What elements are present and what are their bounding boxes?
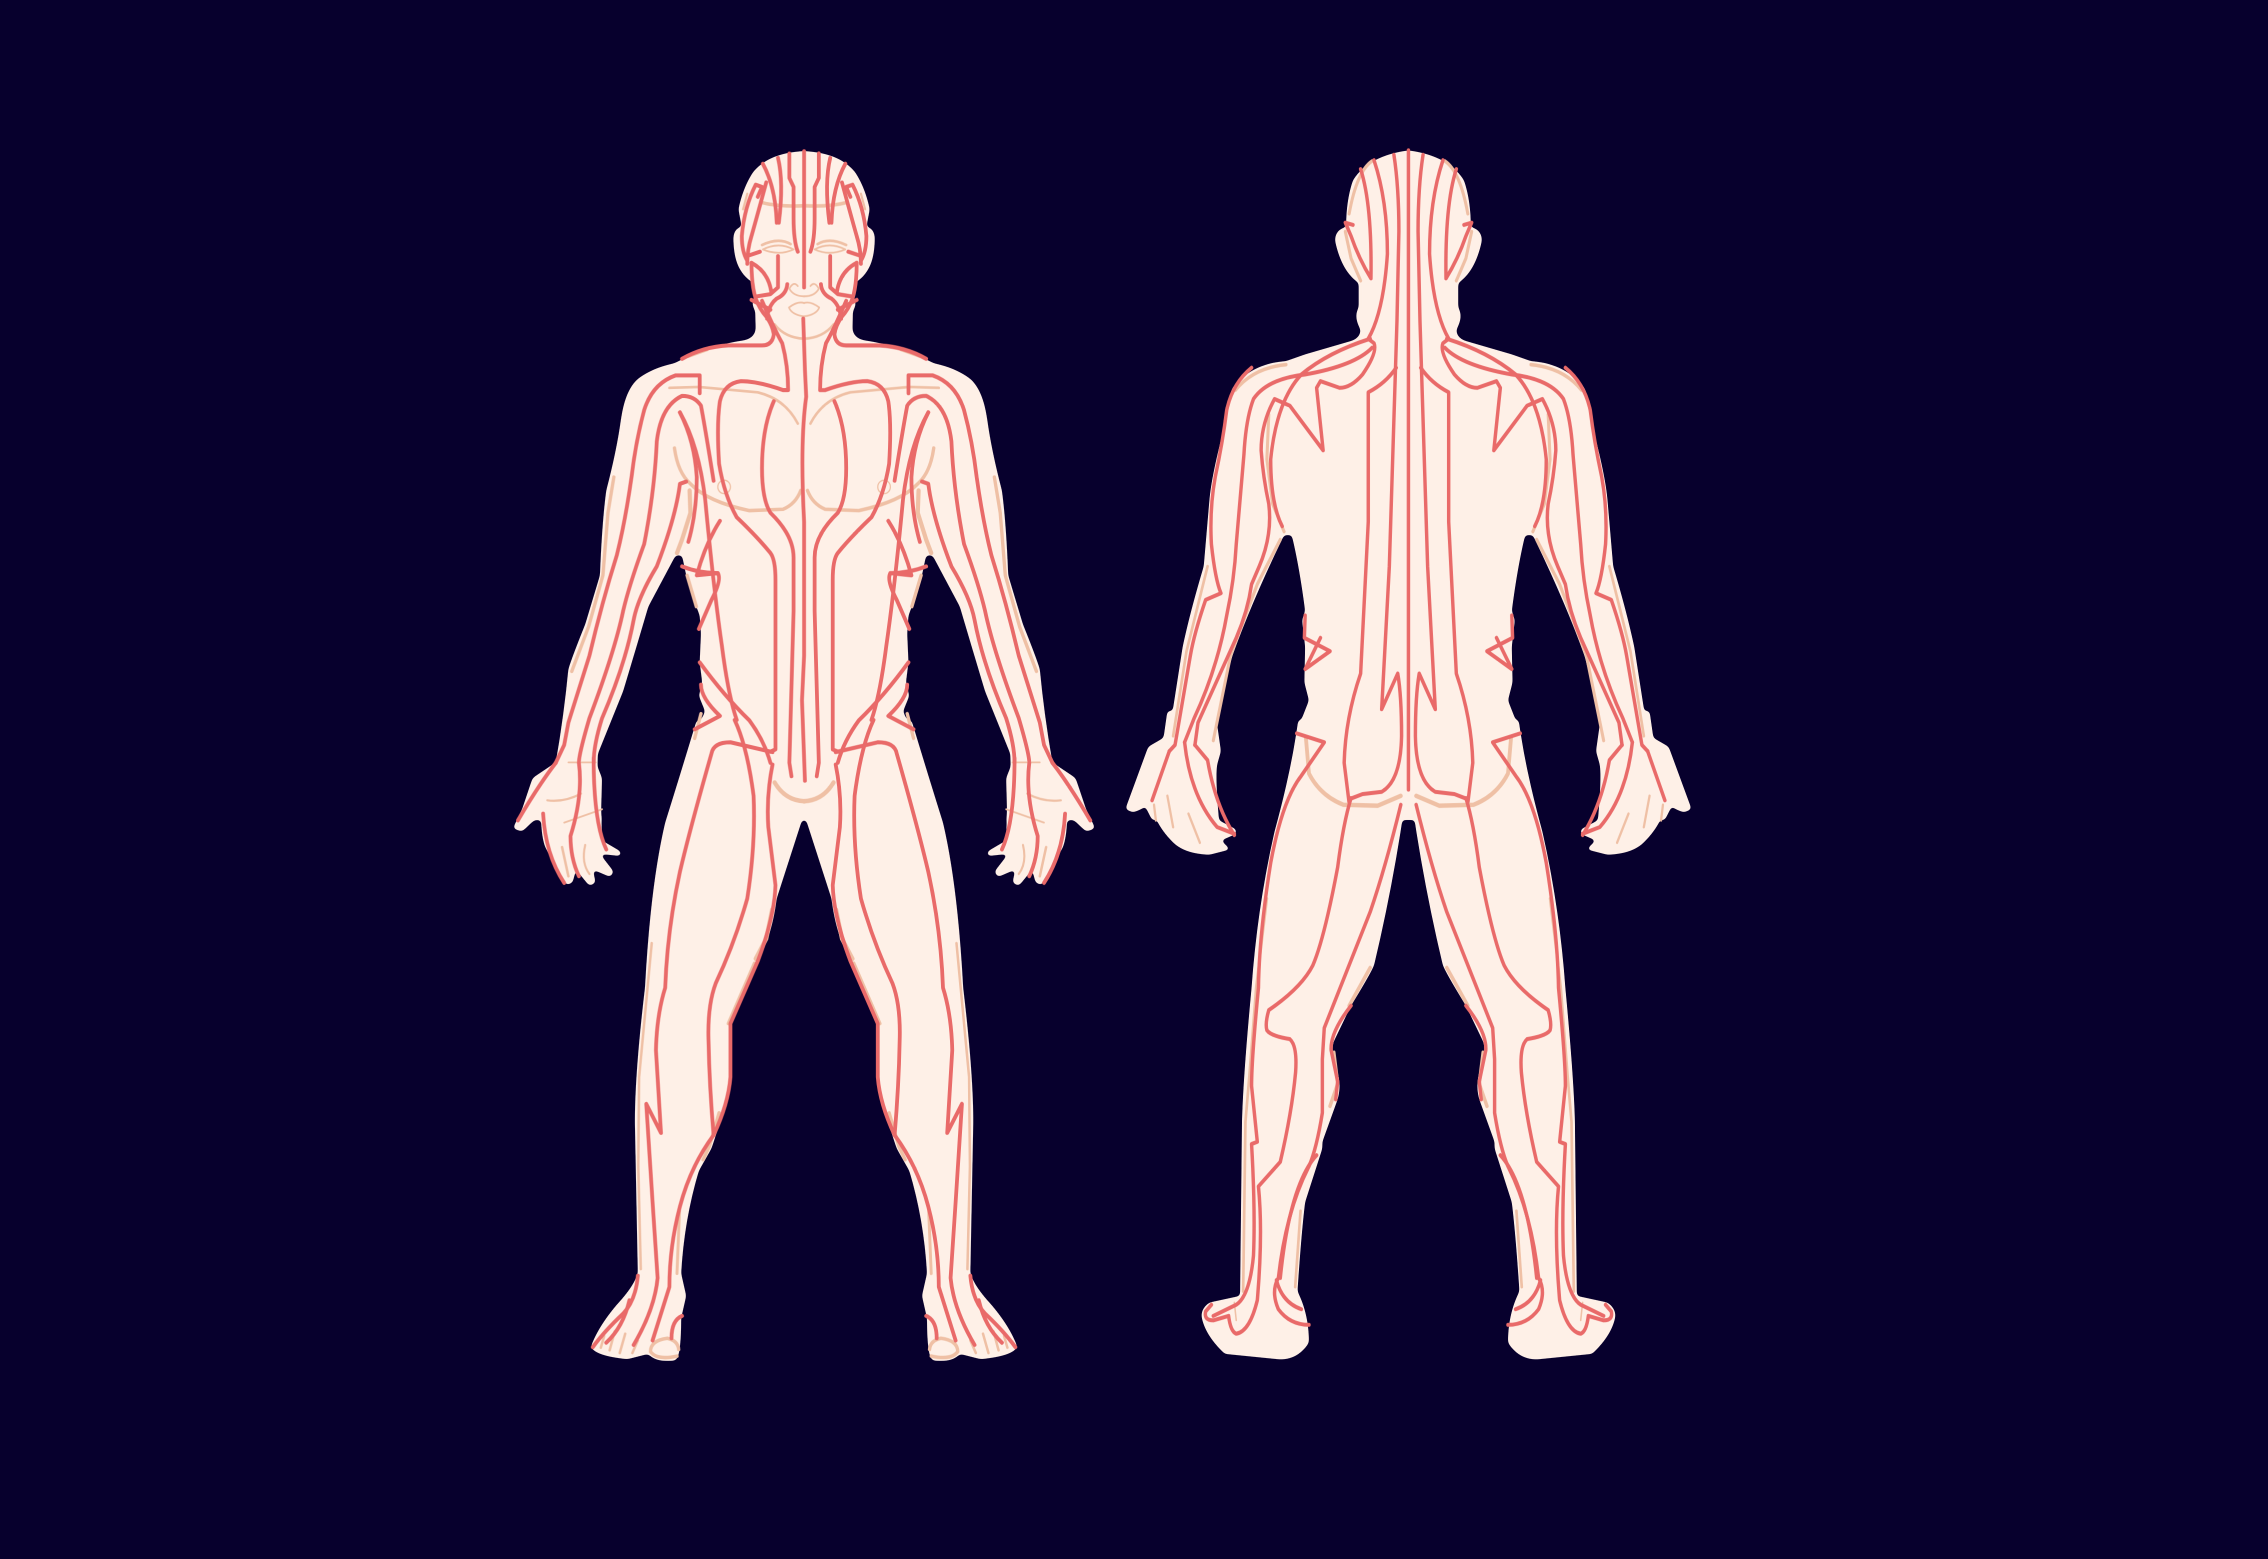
lower body details of back figure bbox=[1416, 733, 1665, 1334]
meridian lines: head and face bbox=[810, 153, 926, 359]
body shading: glute, thigh, calf and hand bbox=[1416, 738, 1663, 1320]
meridian lines: chest and abdomen bbox=[815, 301, 928, 776]
lower body details of front figure bbox=[804, 720, 1090, 1358]
body silhouette: back bbox=[1125, 150, 1692, 1359]
meridian lines: back and flank bbox=[1421, 339, 1648, 803]
meridian lines: leg and foot bbox=[1416, 733, 1612, 1334]
body shading: chest, collarbone and arm bbox=[804, 194, 1036, 738]
body shading: shoulder, armpit and ear bbox=[1445, 161, 1644, 740]
figure: back view of body with meridians bbox=[1125, 150, 1692, 1359]
back figure details: shading and meridian lines, right half bbox=[1415, 155, 1665, 1334]
meridian lines: arm bbox=[895, 375, 1052, 763]
meridian lines: hand bbox=[1002, 758, 1090, 883]
central meridian line of front figure bbox=[802, 151, 806, 781]
front figure details: shading and meridian lines, right half bbox=[804, 153, 1090, 1358]
meridian lines: leg and foot bbox=[833, 720, 1015, 1347]
body silhouette: front bbox=[513, 151, 1095, 1361]
mirrored left half of front figure details bbox=[518, 153, 804, 1358]
meridian lines: hand bbox=[1583, 742, 1665, 835]
mirrored left half of back figure details bbox=[1152, 155, 1402, 1334]
body shading: groin, thigh, calf, hand and foot bbox=[804, 762, 1061, 1358]
meridian lines: head and neck bbox=[1415, 155, 1472, 799]
figure: front view of body with meridians bbox=[513, 151, 1095, 1361]
central meridian line of back figure bbox=[1404, 150, 1413, 790]
